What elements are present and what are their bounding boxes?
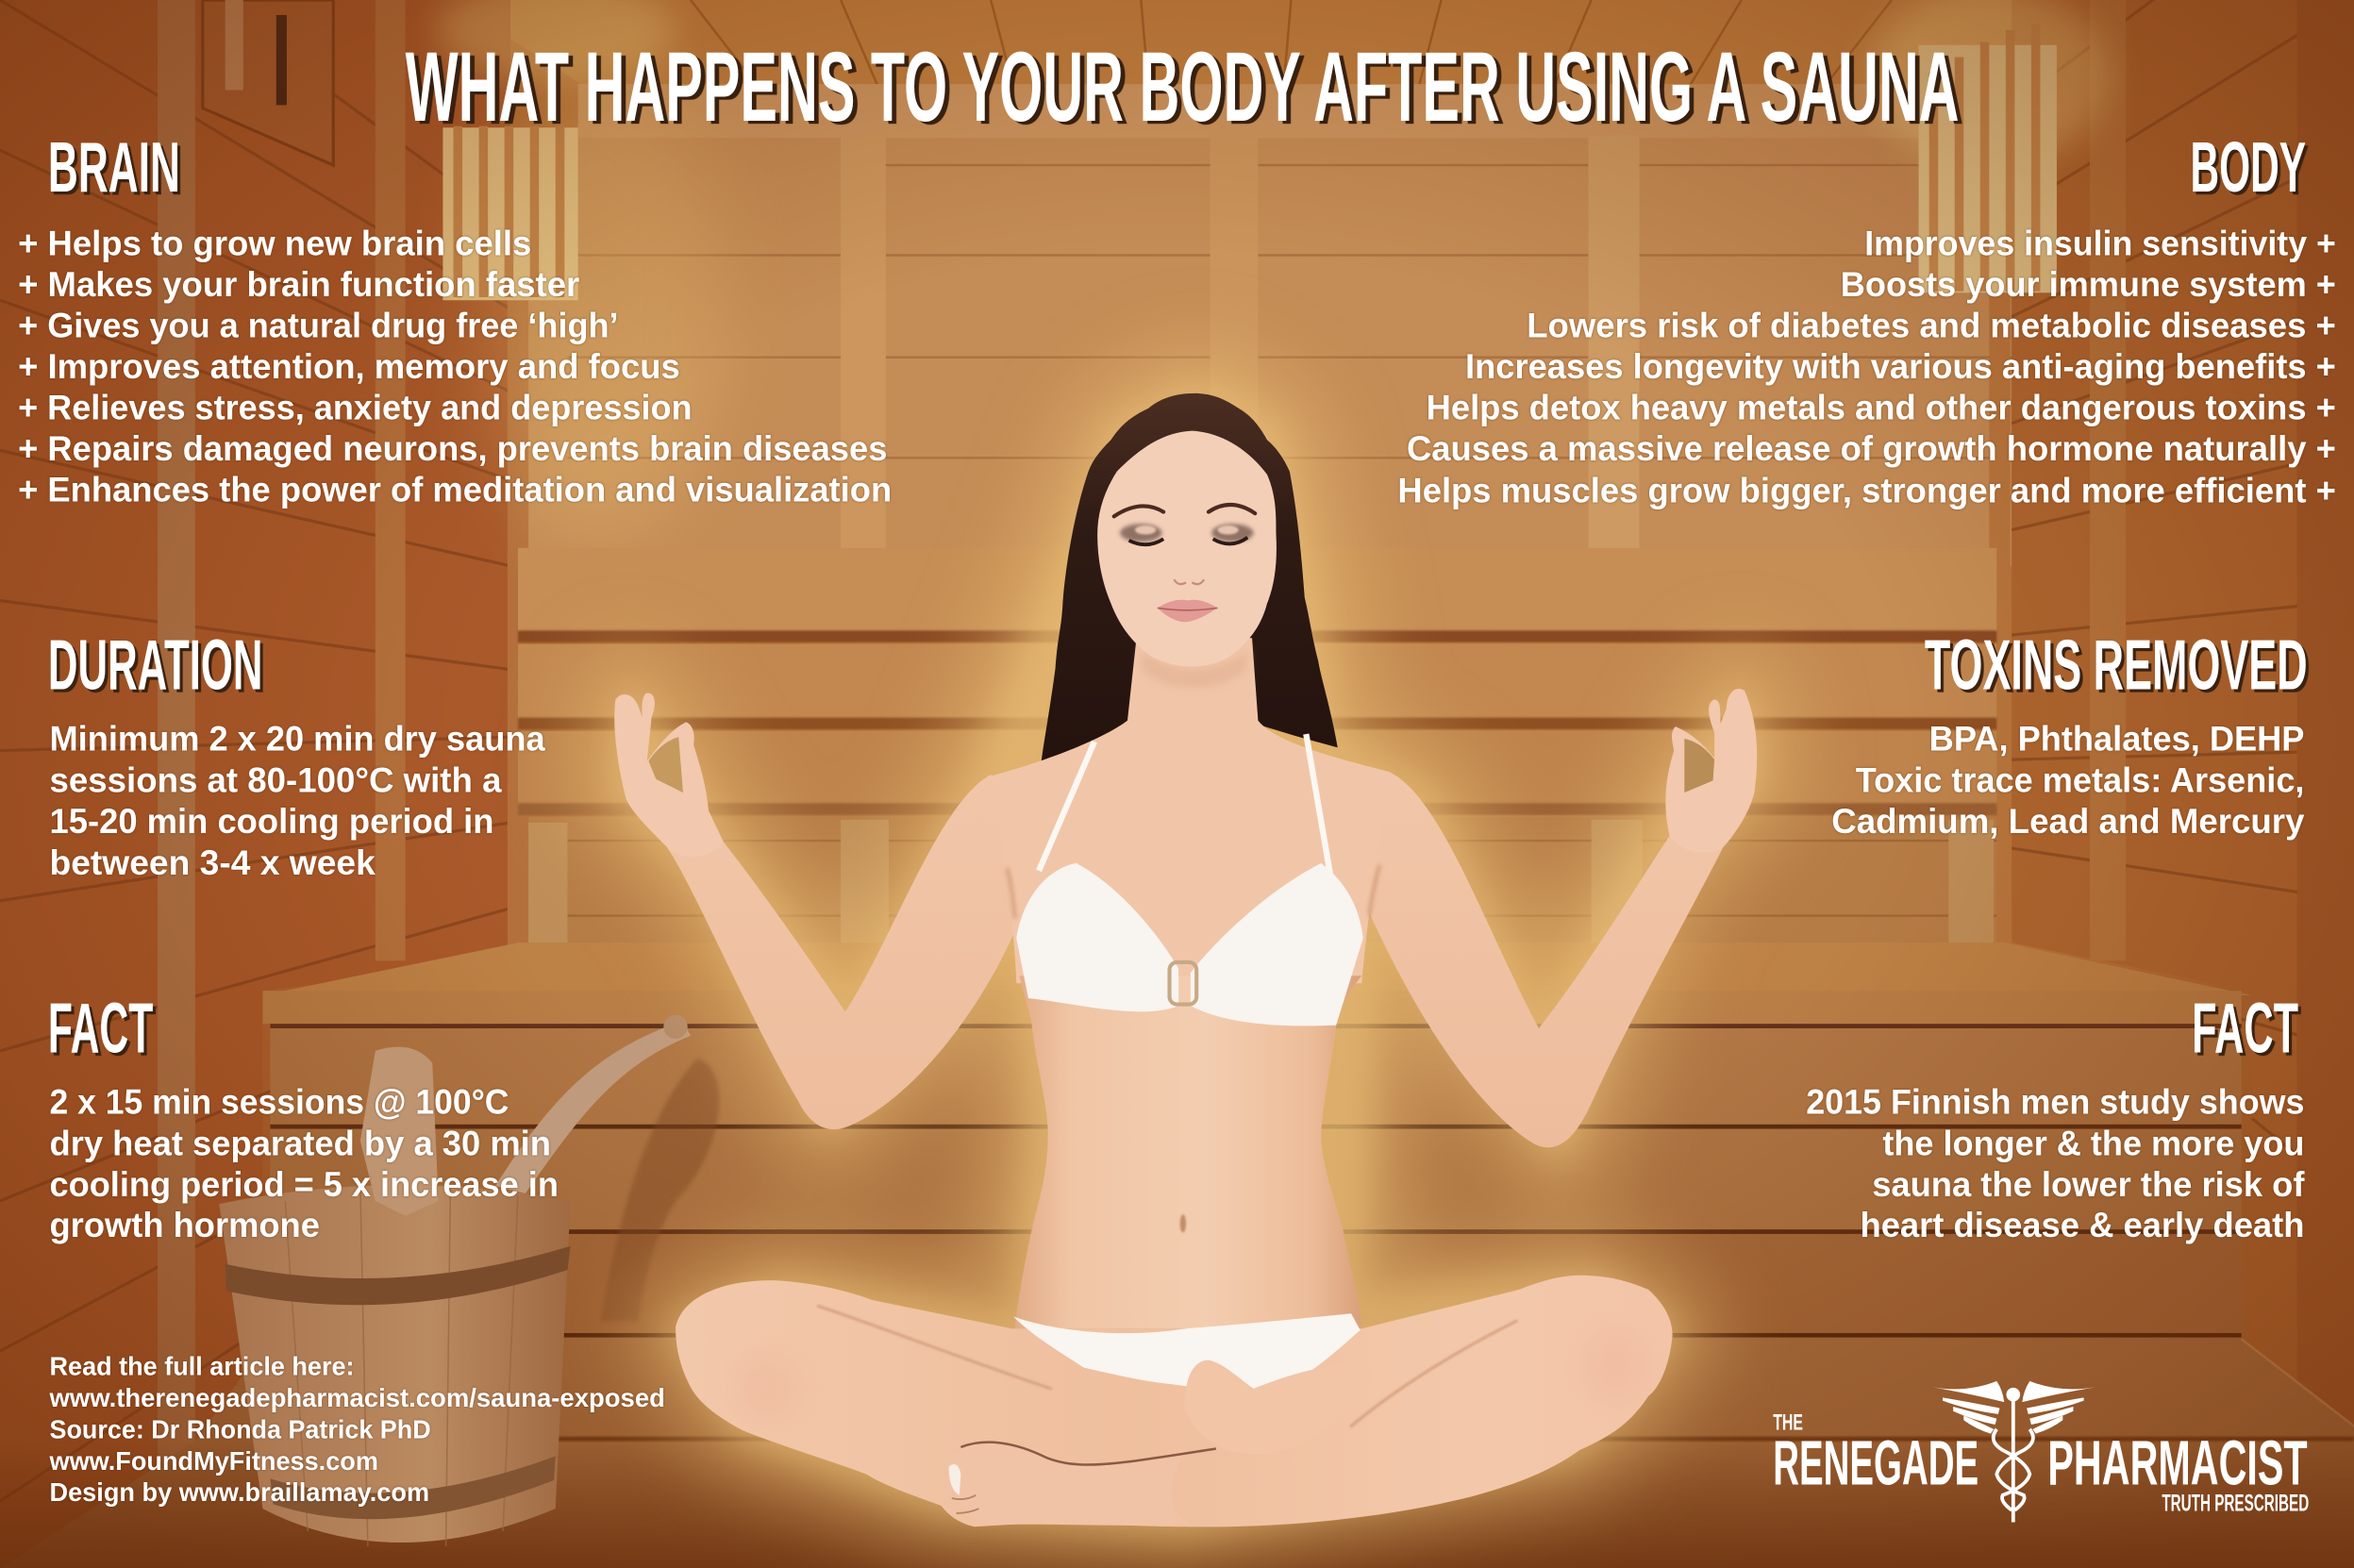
torso bbox=[1015, 976, 1361, 1328]
body benefits list: Helps muscles grow bigger, stronger and more efficient + bbox=[1397, 471, 2336, 509]
icon: caduceus bbox=[1932, 1381, 2095, 1522]
brain benefits list: + Relieves stress, anxiety and depression bbox=[18, 389, 693, 427]
chin shadow bbox=[1141, 648, 1249, 688]
bikini straps bbox=[1039, 734, 1330, 874]
panel: duration bbox=[48, 625, 545, 882]
central foot bbox=[1184, 1360, 1372, 1455]
right wall planks bbox=[1989, 0, 2354, 1568]
wooden bucket and ladle bbox=[219, 1015, 719, 1546]
right wing bbox=[2022, 1381, 2095, 1434]
body benefits list: Lowers risk of diabetes and metabolic diseases + bbox=[1527, 307, 2336, 345]
legs bbox=[676, 1276, 1673, 1526]
source and credits bbox=[49, 1352, 665, 1507]
toxins text: Cadmium, Lead and Mercury bbox=[1831, 802, 2305, 841]
source and credits: www.therenegadepharmacist.com/sauna-exposed bbox=[49, 1383, 665, 1412]
source and credits: www.FoundMyFitness.com bbox=[49, 1446, 378, 1476]
golden glow bbox=[619, 388, 1757, 1528]
ceiling slats bbox=[450, 0, 2102, 138]
body benefits list bbox=[1397, 225, 2336, 509]
brain benefits list: + Gives you a natural drug free ‘high’ bbox=[18, 307, 619, 345]
ladle bbox=[495, 1021, 691, 1193]
toxins text: Toxic trace metals: Arsenic, bbox=[1856, 760, 2304, 799]
growth hormone fact: 2 x 15 min sessions @ 100°C bbox=[50, 1083, 509, 1122]
hair bbox=[1041, 393, 1338, 769]
growth hormone fact: dry heat separated by a 30 min bbox=[50, 1124, 551, 1162]
closed eyes bbox=[1120, 524, 1254, 544]
chest and neck bbox=[991, 638, 1389, 983]
source and credits: Source: Dr Rhonda Patrick PhD bbox=[50, 1414, 431, 1443]
left infrared lamp bbox=[435, 0, 721, 541]
panel: brain bbox=[18, 127, 892, 509]
source and credits: Design by www.braillamay.com bbox=[50, 1477, 429, 1507]
growth hormone fact: cooling period = 5 x increase in bbox=[50, 1165, 559, 1204]
toxins text bbox=[1831, 720, 2305, 841]
brain benefits list: + Enhances the power of meditation and visualization bbox=[18, 470, 892, 509]
panel: fact left bbox=[48, 988, 559, 1244]
body benefits list: Improves insulin sensitivity + bbox=[1864, 225, 2336, 263]
knee blush bbox=[733, 1330, 1644, 1422]
upper benches bbox=[518, 548, 1996, 944]
brain benefits list: + Helps to grow new brain cells bbox=[18, 225, 531, 263]
left hand bbox=[614, 693, 724, 857]
left arm bbox=[666, 775, 1051, 1129]
bucket bands bbox=[225, 1246, 571, 1305]
finnish study fact: heart disease & early death bbox=[1860, 1206, 2304, 1244]
navel bbox=[1180, 1214, 1186, 1232]
brain benefits list: + Makes your brain function faster bbox=[18, 265, 579, 304]
window frame on left wall bbox=[203, 0, 333, 165]
growth hormone fact: growth hormone bbox=[50, 1206, 320, 1244]
duration text bbox=[50, 720, 545, 882]
logo: the renegade pharmacist: RENEGADE bbox=[1773, 1429, 1978, 1499]
ladle shadow on bench bbox=[600, 1059, 719, 1321]
bikini bottom bbox=[1013, 1313, 1361, 1389]
left wing bbox=[1932, 1381, 2004, 1434]
floor bbox=[0, 1338, 2354, 1568]
source and credits: Read the full article here: bbox=[50, 1352, 355, 1381]
brain benefits list: + Repairs damaged neurons, prevents brain diseases bbox=[18, 429, 887, 468]
woman meditating bbox=[614, 388, 1757, 1528]
logo: the renegade pharmacist: THE bbox=[1773, 1410, 1803, 1436]
face bbox=[1097, 431, 1277, 666]
armpit shading bbox=[1008, 865, 1379, 919]
eyebrows bbox=[1114, 505, 1255, 516]
duration text: Minimum 2 x 20 min dry sauna bbox=[50, 720, 545, 759]
bucket body bbox=[219, 1185, 571, 1543]
growth hormone fact bbox=[50, 1083, 559, 1244]
body benefits list: Helps detox heavy metals and other dangerous toxins + bbox=[1427, 389, 2336, 427]
body benefits list: Boosts your immune system + bbox=[1841, 265, 2336, 304]
logo: the renegade pharmacist bbox=[1773, 1381, 2309, 1522]
heading: fact: FACT bbox=[48, 988, 153, 1067]
left wall planks bbox=[0, 0, 528, 1568]
right arm bbox=[1344, 772, 1727, 1147]
leg crease shading bbox=[818, 1306, 1516, 1426]
panel: fact right bbox=[1806, 988, 2305, 1244]
panel: toxins removed bbox=[1831, 625, 2308, 841]
finnish study fact: sauna the lower the risk of bbox=[1872, 1165, 2305, 1204]
finnish study fact: 2015 Finnish men study shows bbox=[1806, 1083, 2304, 1122]
duration text: 15-20 min cooling period in bbox=[50, 802, 494, 841]
finnish study fact bbox=[1806, 1083, 2305, 1244]
duration text: sessions at 80-100°C with a bbox=[50, 760, 502, 799]
finnish study fact: the longer & the more you bbox=[1882, 1124, 2304, 1162]
lower bench seat bbox=[262, 942, 2252, 1338]
brain benefits list bbox=[18, 225, 892, 509]
heading: duration: DURATION bbox=[48, 625, 262, 704]
body benefits list: Increases longevity with various anti-aging benefits + bbox=[1465, 347, 2336, 386]
duration text: between 3-4 x week bbox=[50, 843, 376, 882]
serpents bbox=[1994, 1429, 2033, 1510]
lower foot and toes bbox=[947, 1443, 1216, 1526]
heading: brain: BRAIN bbox=[48, 127, 180, 207]
body benefits list: Causes a massive release of growth hormone naturally + bbox=[1407, 429, 2336, 468]
brain benefits list: + Improves attention, memory and focus bbox=[18, 347, 680, 386]
right hand bbox=[1665, 689, 1757, 853]
lid handle bbox=[360, 1047, 439, 1216]
lips bbox=[1158, 600, 1217, 622]
toxins text: BPA, Phthalates, DEHP bbox=[1929, 720, 2304, 759]
nose bbox=[1174, 579, 1204, 584]
bikini top bbox=[1016, 863, 1363, 1026]
panel: body bbox=[1397, 127, 2336, 509]
right infrared lamp bbox=[1869, 0, 2110, 292]
back wall planks bbox=[510, 135, 2012, 566]
